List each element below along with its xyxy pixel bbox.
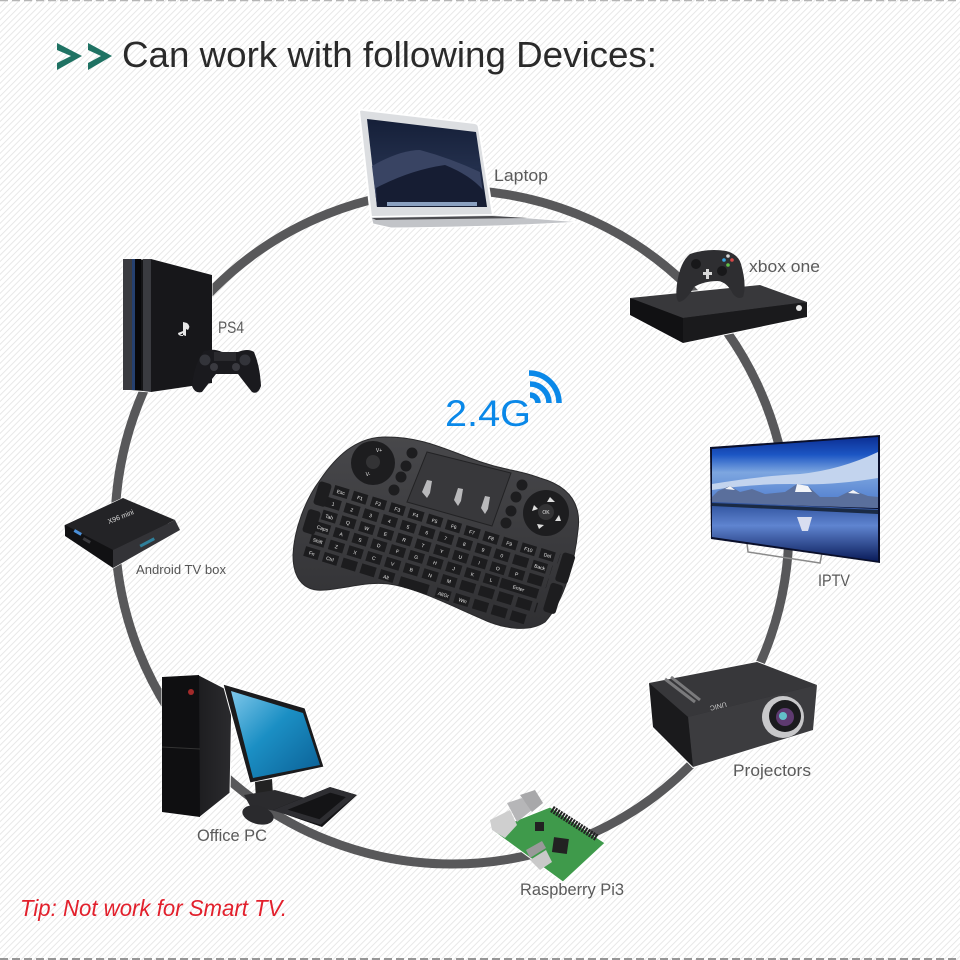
navigation d-pad xyxy=(523,490,569,536)
device: projector xyxy=(649,662,817,780)
device: Android TV box: X96 mini xyxy=(107,509,135,526)
key grid xyxy=(303,485,560,628)
device: Android TV box xyxy=(64,498,227,577)
keyboard body xyxy=(293,437,579,628)
projector lens xyxy=(762,696,804,738)
title xyxy=(57,34,657,75)
key grid: ASDFGHJKL xyxy=(339,532,493,584)
touchpad xyxy=(407,452,511,526)
device: laptop xyxy=(359,110,580,228)
media d-pad xyxy=(351,441,395,485)
media d-pad: V- xyxy=(366,472,371,478)
label: xbox one: xbox one xyxy=(749,257,820,276)
key grid: Alt xyxy=(382,574,390,582)
label: Projectors: Projectors xyxy=(733,761,811,780)
key grid: Ctrl xyxy=(325,556,334,564)
tip note: Tip: Not work for Smart TV. xyxy=(20,895,287,921)
connecting ring xyxy=(115,190,789,864)
icon: wifi waves xyxy=(529,373,559,403)
key grid: Shift xyxy=(312,537,324,546)
key grid: Caps xyxy=(316,525,329,534)
device: PS4 xyxy=(123,259,261,393)
key grid: Back xyxy=(533,563,546,572)
media d-pad: V+ xyxy=(376,448,382,454)
key grid: Win xyxy=(457,597,468,605)
key grid: Esc xyxy=(336,489,346,497)
key grid: 1234567890 xyxy=(331,501,504,560)
device: Raspberry Pi3 xyxy=(490,790,624,899)
key grid: Fn xyxy=(308,550,315,558)
key grid: F2 xyxy=(374,501,382,508)
xbox controller xyxy=(676,250,745,302)
label: Raspberry Pi3: Raspberry Pi3 xyxy=(520,880,624,899)
text: 2.4G: 2.4G xyxy=(445,393,531,434)
desktop keyboard xyxy=(273,787,357,827)
label: PS4: PS4 xyxy=(218,318,244,337)
function buttons xyxy=(388,448,528,528)
computer tower xyxy=(162,675,232,817)
icon: PS logo xyxy=(178,322,189,336)
key grid: F7 xyxy=(468,529,476,537)
label: IPTV: IPTV xyxy=(818,571,851,590)
key grid: Enter xyxy=(512,584,525,594)
mouse xyxy=(240,802,276,828)
navigation d-pad: OK xyxy=(542,510,550,516)
key grid: F6 xyxy=(450,524,457,531)
label: Office PC: Office PC xyxy=(197,826,267,845)
key grid: Tab xyxy=(324,514,334,522)
key grid: F4 xyxy=(412,512,419,520)
device: xbox one xyxy=(630,250,820,343)
icon: double chevron xyxy=(57,43,112,70)
device: projector: UNIC xyxy=(709,700,727,711)
monitor xyxy=(223,684,324,783)
key grid: F3 xyxy=(393,506,401,514)
key grid: AltGr xyxy=(437,591,450,600)
wireless mini keyboard xyxy=(293,437,579,628)
key grid: F9 xyxy=(505,541,513,548)
heading text: Can work with following Devices: xyxy=(122,34,657,75)
device: IPTV xyxy=(710,435,880,590)
key grid: F1 xyxy=(356,495,364,503)
ps4 controller xyxy=(192,350,261,393)
key grid: QWERTYUIOP xyxy=(345,520,520,578)
key grid: F10 xyxy=(523,546,533,554)
key grid: Del xyxy=(543,552,552,560)
label: Android TV box: Android TV box xyxy=(136,563,227,577)
side mouse keys xyxy=(302,481,576,615)
key grid: ZXCVBNM xyxy=(334,544,451,585)
wireless badge: 2.4G xyxy=(445,373,559,434)
key grid: F8 xyxy=(487,535,495,543)
device: Office PC xyxy=(162,675,357,845)
key grid: F5 xyxy=(431,518,438,525)
label: Laptop: Laptop xyxy=(494,166,548,185)
